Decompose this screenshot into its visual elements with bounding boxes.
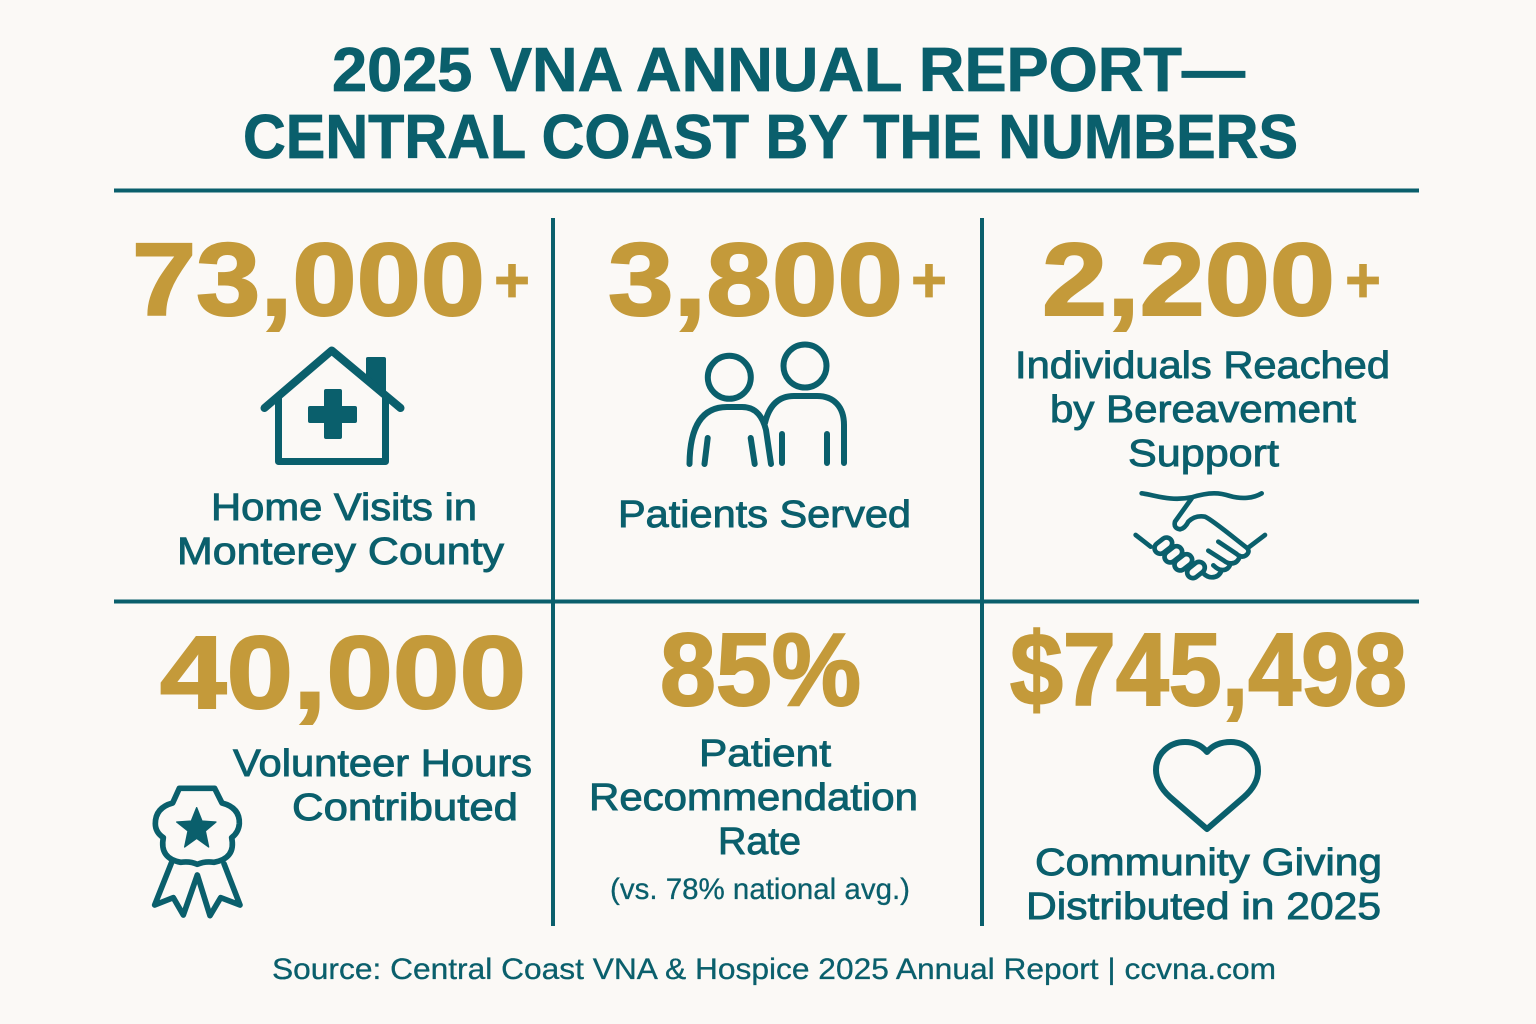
panel: patients served [608, 222, 947, 536]
icon: house with medical cross [264, 350, 400, 462]
stat: 2,200+: + [1345, 244, 1381, 316]
label: home visits: Home Visits in [211, 487, 477, 529]
label: recommendation rate: Patient [699, 733, 831, 775]
icon: award ribbon [155, 788, 240, 916]
panel: recommendation rate [589, 612, 918, 906]
stat: 85%: 85% [660, 612, 861, 727]
stat: 3,800+: + [911, 244, 947, 316]
label: bereavement support: Individuals Reached [1015, 345, 1390, 387]
stat: 73,000+: + [494, 244, 530, 316]
panel: bereavement support [1015, 222, 1390, 580]
title: CENTRAL COAST BY THE NUMBERS [243, 103, 1298, 172]
stat: 2,200+: 2,200 [1042, 222, 1335, 337]
source line: Source: Central Coast VNA & Hospice 2025 Annual Report | ccvna.com [272, 953, 1276, 986]
stat: 73,000+: 73,000 [132, 222, 485, 337]
panel: home visits [132, 222, 530, 573]
icon: heart [1156, 742, 1258, 829]
stat: $745,498: $745,498 [1010, 612, 1407, 727]
label: community giving: Community Giving [1035, 842, 1382, 884]
title: 2025 VNA ANNUAL REPORT— [332, 36, 1245, 105]
panel: community giving [1010, 612, 1407, 928]
label: bereavement support: by Bereavement [1050, 389, 1356, 431]
label: recommendation rate [589, 733, 918, 863]
label: bereavement support: Support [1128, 433, 1280, 475]
label: community giving [1026, 842, 1382, 928]
label: home visits: Monterey County [177, 531, 504, 573]
icon: two people [690, 344, 844, 464]
label: community giving: Distributed in 2025 [1026, 886, 1381, 928]
label: recommendation rate: Recommendation [589, 777, 918, 819]
stat: 40,000: 40,000 [160, 615, 526, 730]
label: volunteer hours [233, 743, 532, 829]
title [243, 36, 1298, 172]
panel: volunteer hours [155, 615, 532, 916]
note: national average: (vs. 78% national avg.) [610, 873, 910, 906]
label: patients served: Patients Served [618, 494, 911, 536]
label: home visits [177, 487, 504, 573]
icon: handshake [1136, 493, 1265, 580]
label: recommendation rate: Rate [718, 821, 801, 863]
label: bereavement support [1015, 345, 1390, 475]
label: volunteer hours: Contributed [292, 787, 518, 829]
stat: 3,800+: 3,800 [608, 222, 903, 337]
label: volunteer hours: Volunteer Hours [233, 743, 532, 785]
